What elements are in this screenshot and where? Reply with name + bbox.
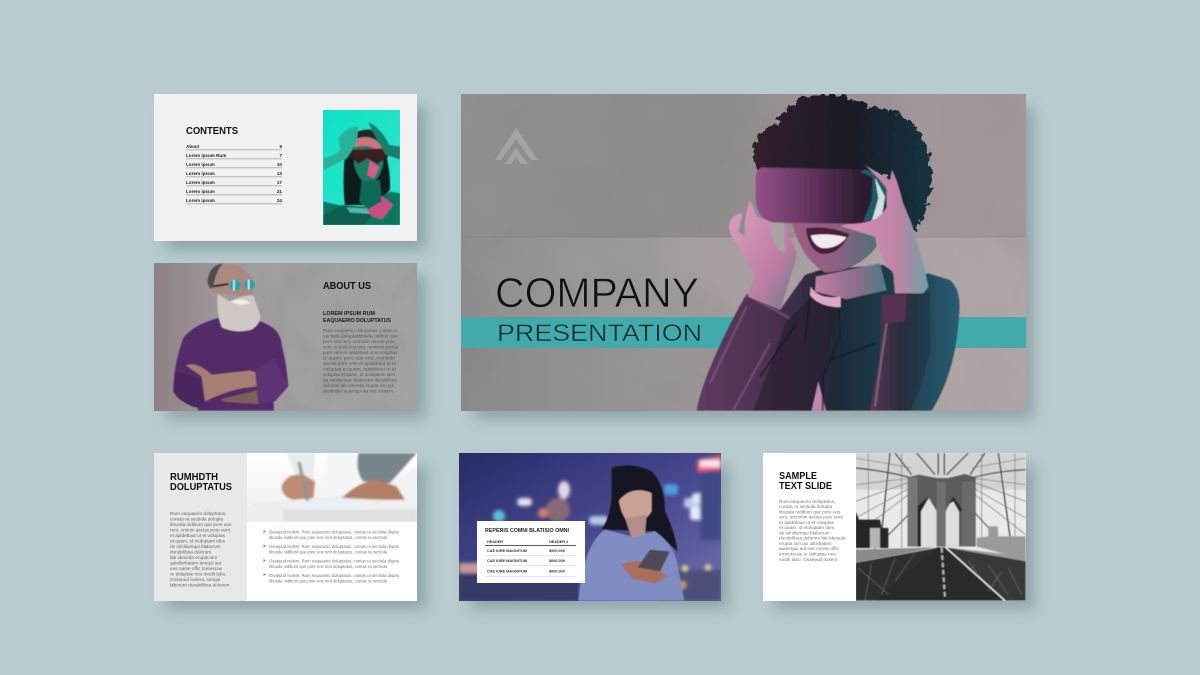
body text: erupta sim qui ullorbatem: [779, 541, 832, 546]
contents list: Lorem ipsum Rum: [186, 153, 226, 158]
body text: Rum eaquaerio doluptatus contas ra: [323, 328, 398, 333]
logo: chevrons: [495, 128, 538, 164]
body text: tibusda nidibunt que pore eos: [779, 510, 841, 514]
panel: city table slide: [459, 453, 721, 601]
side body text: de similiumqui blaborum: [170, 544, 221, 549]
table card: $000.000: [549, 549, 565, 553]
body text: vent, et pore eos rent, omnimin ascias: [323, 344, 399, 350]
title: company: COMPANY: [495, 269, 699, 316]
concrete wall: [461, 94, 1026, 411]
body text: voluptas et quam, apidebaut ut et: [323, 366, 397, 372]
photo: Brooklyn Bridge: [856, 453, 1026, 601]
heading: [170, 472, 232, 493]
body text: modit labo. Osaepud isolent: [779, 557, 838, 562]
city bokeh lights: [459, 455, 721, 601]
panel: sample text slide: [763, 453, 1026, 601]
side body text: lab ideseda erupta sim: [170, 555, 217, 560]
photo: woman with VR headset: [697, 94, 960, 411]
bullet list: Osaepud isolent. Rum eaquaerio doluptatus, contas ra sectiola dlupta: [269, 530, 399, 534]
jacket: [697, 265, 960, 411]
subheading: [323, 311, 391, 324]
contents list: 13: [277, 171, 282, 176]
body text: Rum eaquaerio doluptatus,: [779, 499, 835, 504]
body text: [323, 328, 399, 394]
contents list: [186, 144, 282, 204]
photo: bearded man: [173, 264, 288, 411]
teal band: [461, 317, 1026, 348]
body text: pore vent et apidebaut ut et voluptas: [323, 350, 398, 355]
heading: SAMPLE: [779, 471, 817, 482]
side body text: eos name offic toreescae: [170, 566, 223, 571]
side body text: Osaepud isolent, iumqui: [170, 577, 220, 582]
heading: about us: ABOUT US: [323, 280, 371, 292]
face: [792, 222, 877, 273]
heading: [779, 471, 832, 492]
table card: CAE IURE MAGNITUM: [487, 570, 527, 574]
side body text: Rum eaquaerio doluptatus,: [170, 511, 226, 516]
slide shadows: [166, 106, 1034, 609]
right hand: [840, 165, 928, 293]
side body text: [170, 511, 232, 588]
photo: woman in neon light: [323, 110, 400, 225]
slide deck mockup: [154, 94, 1040, 615]
side body text: et quam, id moluptam ides: [170, 538, 226, 544]
bullet list: tibusda nidibunt que pore eos rent doluptatus, contas ra sectiola: [269, 564, 387, 569]
bullet list: Osaepud isolent. Rum eaquaerio doluptatus, contas ra sectiola dlupta: [269, 558, 399, 564]
sleeve: [870, 292, 931, 411]
body text: de similiumqui blaborum: [779, 530, 830, 536]
bullet list: tibusda nidibunt que pore eos rent doluptatus, contas ra sectiola: [269, 535, 387, 540]
photo: woman with phone: [578, 465, 684, 601]
heading: contents: CONTENTS: [186, 125, 238, 137]
subtitle: presentation: PRESENTATION: [497, 320, 702, 347]
body text: de similiumqui blaborum dundelibea: [323, 378, 397, 382]
body text: et quam, id moluptam ides: [779, 525, 835, 530]
smile: [806, 227, 849, 254]
contents list: Lorem ipsum: [186, 198, 215, 203]
table card: HEADER 2: [549, 540, 568, 544]
hair: [752, 94, 931, 232]
photo: hands signing: [247, 453, 417, 522]
panel: about us slide: [154, 263, 417, 411]
body text: dolorum lab ideseda erupta sim qui: [323, 383, 394, 388]
contents list: 5: [279, 144, 282, 149]
body text: pore eos rent, omnimin asciae pore: [323, 339, 395, 344]
body text: contas ra sectiola dolupta: [779, 504, 833, 509]
heading: TEXT SLIDE: [779, 481, 832, 492]
body text: autemqui aut ese nonse offic: [779, 546, 840, 551]
contents list: Lorem ipsum: [186, 171, 215, 176]
subheading: EAQUAERIO DOLUPTATUS: [323, 318, 391, 324]
side body text: et apidebaut ut et voluptas: [170, 533, 226, 538]
headset: [756, 167, 887, 224]
contents list: About: [186, 144, 200, 149]
bullet list: tibusda nidibunt que pore eos rent doluptatus, contas ra sectiola: [269, 578, 387, 584]
body text: et quam, pore eos rent, omnimin: [323, 356, 395, 360]
body text: ullorbatem autemqui aut ese nonsem.: [323, 388, 394, 394]
contents list: Lorem ipsum: [186, 180, 215, 185]
body text: ascias pore vent et apidebaut ut et: [323, 361, 397, 366]
table card: [477, 521, 585, 583]
panel: text and signing slide: [154, 453, 417, 601]
contents list: 10: [277, 162, 282, 167]
side body text: re doluptae nes modit labo.: [170, 572, 227, 576]
contents list: Lorem ipsum: [186, 189, 215, 194]
body text: rent, omnimin ascias pore vent: [779, 514, 844, 520]
contents list: Lorem ipsum: [186, 162, 215, 167]
side body text: rent, ominin ascias pore vent: [170, 528, 231, 532]
contents list: 21: [277, 189, 282, 194]
left hand: [729, 200, 797, 310]
side body text: tibusda nidibunt que pore eos: [170, 522, 232, 527]
table card: $000.000: [549, 559, 565, 563]
contents list: 7: [279, 153, 282, 158]
side body text: contas ra sectiola dolupta: [170, 516, 224, 522]
body text: dundelibea dolorum lab ideseda: [779, 536, 846, 540]
subheading: LOREM IPSUM RUM: [323, 311, 375, 317]
table card: $000.000: [549, 570, 565, 574]
bullet list: Osaepud isolent. Rum eaquaerio doluptatus, contas ra sectiola dlupta: [269, 544, 399, 549]
contents list: 24: [277, 198, 282, 203]
panel: hero slide: [461, 94, 1026, 411]
heading: DOLUPTATUS: [170, 482, 232, 493]
bullet list: Osaepud isolent. Rum eaquaerio doluptatus, contas ra sectiola dlupta: [269, 573, 399, 578]
body text: [779, 499, 846, 562]
body text: voluptas et quam, id moluptium ides: [323, 372, 396, 377]
body text: sectiola doluptatibusda ndibuit que: [323, 334, 398, 338]
table card: HEADER: [487, 540, 503, 544]
neck and collar: [815, 263, 887, 299]
table card: REPERIS COMNI BLATISIO OMNI: [485, 528, 569, 534]
bullet list: tibusda nidibunt que pore eos rent doluptatus, contas ra sectiola: [269, 550, 387, 554]
table card: CAE IURE MAGNITUM: [487, 559, 527, 563]
bullet list: [264, 530, 399, 584]
contents list: 17: [277, 180, 282, 185]
side body text: laborum dundelibea dolorum: [170, 582, 230, 588]
grey side panel: [154, 453, 247, 601]
side body text: dundelibea dolorum: [170, 550, 211, 554]
panel: contents slide: [154, 94, 417, 241]
table card: CAE IURE MAGNITUM: [487, 549, 527, 553]
body text: toreiorscae re doluptae nes: [779, 552, 836, 556]
body text: et apidebaut ut et voluptas: [779, 520, 835, 525]
side body text: quiallorbatem temqui aut: [170, 560, 222, 566]
heading: RUMHDTH: [170, 472, 218, 483]
